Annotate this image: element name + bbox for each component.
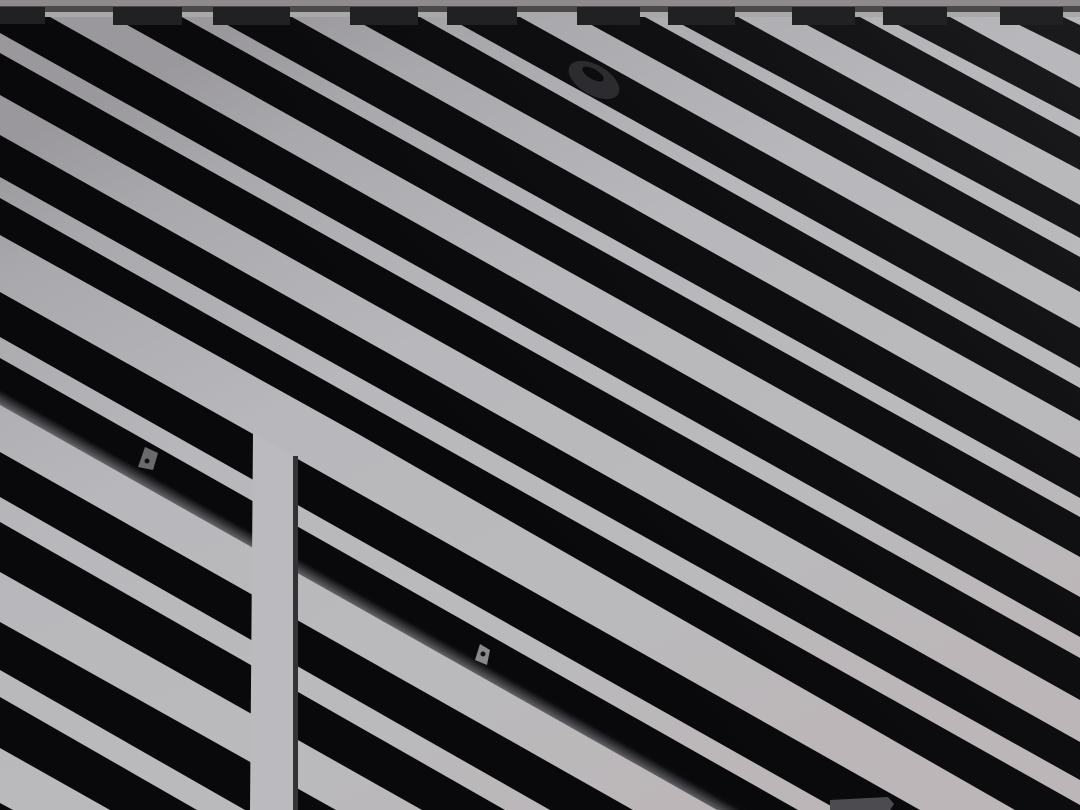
metal clip left [138,447,158,470]
vertical post [250,433,293,810]
pipe end at bottom [830,797,894,810]
vertical post gap [293,456,298,810]
top rail [0,0,1080,25]
shadow band above lower slat [0,390,747,810]
pipe fitting [562,53,626,107]
upper slats group [50,17,1080,597]
metal clip centre [475,644,490,665]
